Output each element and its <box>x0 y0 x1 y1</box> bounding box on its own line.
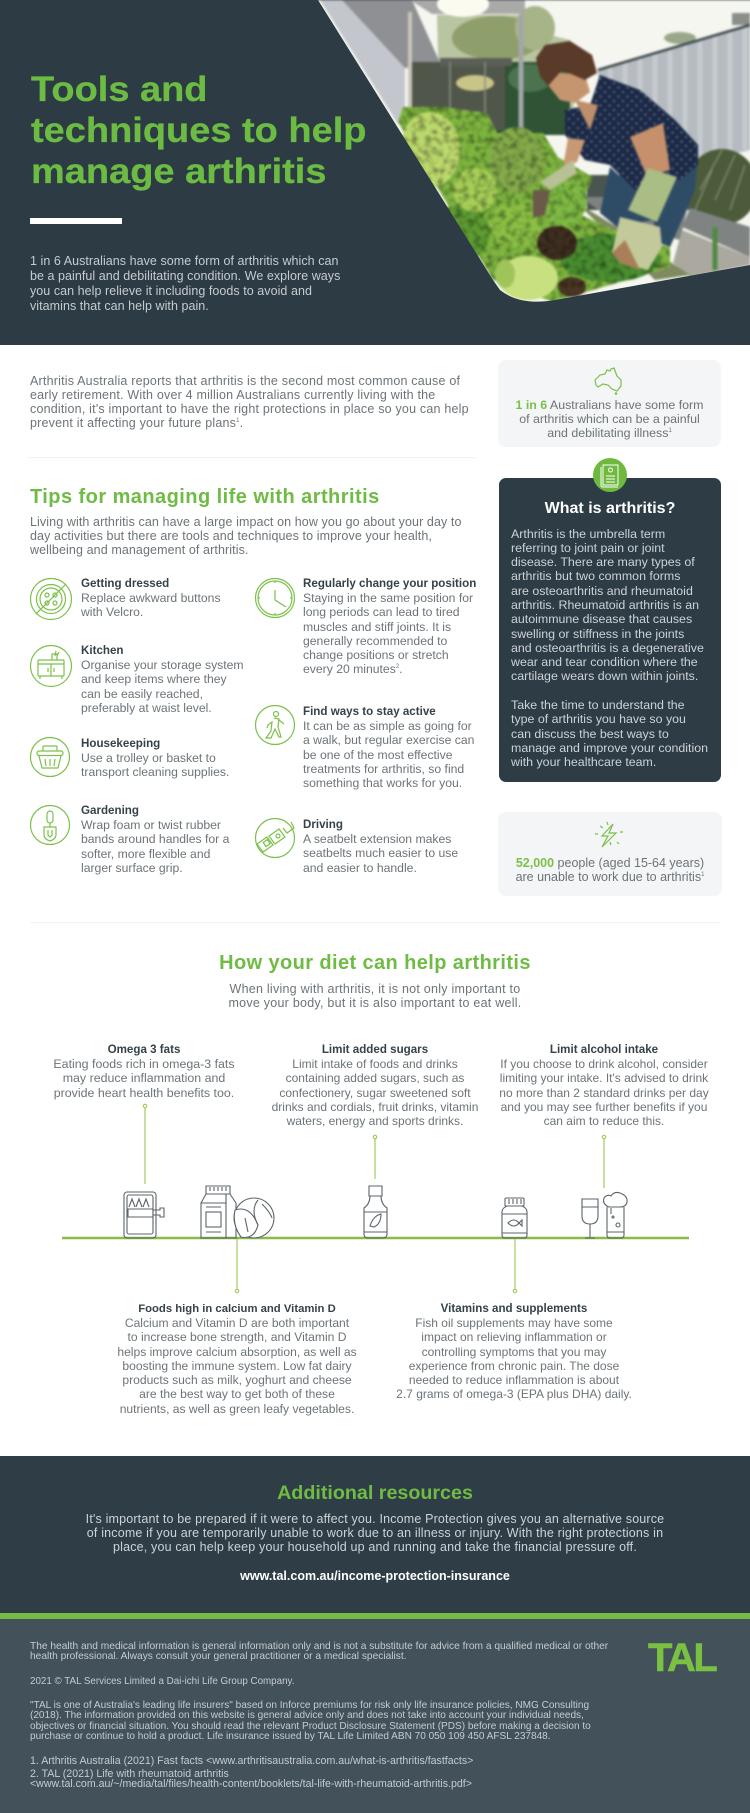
diet note: limit alcohol: If you choose to drink alcohol, consider <box>500 1057 708 1071</box>
tip: kitchen: Organise your storage system <box>81 658 244 672</box>
panel: additional resources <box>0 1456 750 1613</box>
diet note: omega 3 <box>53 1043 235 1100</box>
tip: regularly change your position <box>303 577 476 676</box>
icon: walking person <box>254 704 296 746</box>
diet note: calcium and vitamin D: to increase bone strength, and Vitamin D <box>128 1330 346 1344</box>
tip: regularly change your position: every 20 minutes2. <box>303 662 403 676</box>
tip: kitchen <box>81 644 244 715</box>
icon: sardine can <box>124 1192 164 1238</box>
resources text <box>86 1512 664 1554</box>
tip: housekeeping: transport cleaning supplies. <box>81 765 229 779</box>
intro paragraph: early retirement. With over 4 million Australians currently living with the <box>30 388 435 402</box>
diet note: vitamins and supplements: controlling symptoms that you may <box>422 1345 606 1359</box>
diet note: calcium and vitamin D: Calcium and Vitamin D are both important <box>125 1316 349 1330</box>
tip: regularly change your position: Regularly change your position <box>303 577 476 590</box>
diet note: limit added sugars: drinks and cordials, fruit drinks, vitamin <box>272 1100 478 1114</box>
icon: basket <box>30 736 70 778</box>
legal text: purchase or continue to hold a product. Life insurance issued by TAL Life Limited ABN 70 050 109 450 AFSL 237848. <box>30 1731 551 1742</box>
diet note: limit alcohol: Limit alcohol intake <box>550 1043 658 1056</box>
resources text: of income if you are temporarily unable to work due to an illness or injury. With the right protections in <box>87 1526 663 1540</box>
panel body text: referring to joint pain or joint <box>511 541 665 555</box>
icon: cabbage <box>234 1198 274 1238</box>
diet note: limit alcohol <box>499 1043 709 1128</box>
diet note: vitamins and supplements: needed to reduce inflammation is about <box>409 1373 619 1387</box>
panel body text: type of arthritis you have so you <box>511 712 686 726</box>
title rule <box>30 218 122 224</box>
icon: clock <box>254 578 296 618</box>
hero photo: woman gardening <box>318 0 750 302</box>
diet note: limit alcohol: no more than 2 standard drinks per day <box>499 1086 709 1100</box>
panel body text: are osteoarthritis and rheumatoid <box>511 584 693 598</box>
legal text: (2018). The information provided on this website is general advice only and does not take into account your individual needs, <box>30 1710 584 1721</box>
stat text <box>516 856 704 884</box>
references: <www.tal.com.au/~/media/tal/files/health-content/booklets/tal-life-with-rheumatoid-arthritis.pdf> <box>30 1778 472 1790</box>
tip: gardening: softer, more flexible and <box>81 847 210 861</box>
resources text: It's important to be prepared if it were to affect you. Income Protection gives you an alternative source <box>86 1512 664 1526</box>
panel heading: What is arthritis? <box>545 500 675 516</box>
tip: driving: seatbelts much easier to use <box>303 846 458 860</box>
intro summary <box>30 254 340 313</box>
diet note: vitamins and supplements <box>396 1302 632 1401</box>
icon: beer glass <box>604 1192 627 1238</box>
icon: button crossed out <box>30 578 72 620</box>
diet note: limit added sugars <box>272 1043 478 1128</box>
tip: driving: Driving <box>303 818 343 831</box>
tip: regularly change your position: change positions or stretch <box>303 648 449 662</box>
panel body text: autoimmune disease that causes <box>511 612 692 626</box>
diet note: omega 3: provide heart health benefits too. <box>54 1086 234 1100</box>
copyright: 2021 © TAL Services Limited a Dai-ichi Life Group Company. <box>30 1676 294 1686</box>
resources link: www.tal.com.au/income-protection-insurance <box>240 1568 510 1582</box>
legal text: "TAL is one of Australia's leading life insurers" based on Inforce premiums for risk only life insurance policies, NMG Consulting <box>30 1700 589 1710</box>
tip: find ways to stay active: It can be as simple as going for <box>303 719 472 733</box>
icon: garden trowel <box>30 804 70 846</box>
intro paragraph: condition, it's important to have the right protections in place so you can help <box>30 402 469 416</box>
panel body text: disease. There are many types of <box>511 555 695 569</box>
tip: gardening: Wrap foam or twist rubber <box>81 818 221 832</box>
stat card: 1 in 6 <box>498 360 721 447</box>
chart: food shelf timeline with icons <box>62 1104 689 1294</box>
disclaimer: The health and medical information is general information only and is not a substitute for advice from a qualified medical or other <box>30 1640 608 1652</box>
diet note: calcium and vitamin D: nutrients, as well as green leafy vegetables. <box>120 1402 354 1416</box>
tip: gardening: larger surface grip. <box>81 861 183 875</box>
tip: driving: and easier to handle. <box>303 861 417 875</box>
diet note: calcium and vitamin D <box>117 1303 357 1416</box>
tip: housekeeping: Housekeeping <box>81 737 160 750</box>
tip: housekeeping: Use a trolley or basket to <box>81 751 216 765</box>
icon: green book badge <box>593 458 627 492</box>
intro paragraph: Arthritis Australia reports that arthritis is the second most common cause of <box>30 374 460 388</box>
panel: tips <box>30 486 476 875</box>
resources text: place, you can help keep your household up and running and take the financial pressure off. <box>113 1540 637 1554</box>
diet note: limit added sugars: Limit added sugars <box>322 1043 428 1056</box>
TAL logo: TAL <box>648 1636 715 1680</box>
panel body text: Arthritis is the umbrella term <box>511 526 665 540</box>
stat card: 52,000 <box>498 812 722 896</box>
icon: lightning bolt <box>595 822 623 848</box>
foliage <box>398 107 670 302</box>
disclaimer <box>30 1640 608 1662</box>
title <box>31 70 366 191</box>
diet note: limit alcohol: limiting your intake. It's advised to drink <box>500 1071 708 1085</box>
tip: gardening: bands around handles for a <box>81 832 229 846</box>
panel body text: cartilage wears down within joints. <box>511 669 698 683</box>
tips intro text: Living with arthritis can have a large impact on how you go about your day to <box>30 514 462 528</box>
intro summary: be a painful and debilitating condition. We explore ways <box>30 269 340 283</box>
tip: getting dressed: Replace awkward buttons <box>81 591 221 605</box>
icon: Australia map <box>594 367 622 395</box>
diet note: calcium and vitamin D: helps improve calcium absorption, as well as <box>117 1345 357 1359</box>
intro summary: you can help relieve it including foods to avoid and <box>30 284 312 298</box>
diet intro text: move your body, but it is also important to eat well. <box>228 996 522 1010</box>
glass structure <box>412 62 505 130</box>
diet note: limit added sugars: containing added sugars, such as <box>286 1071 464 1085</box>
diet note: limit added sugars: confectionery, sugar sweetened soft <box>279 1086 471 1100</box>
title: Tools and <box>31 70 208 109</box>
tip: find ways to stay active: Find ways to stay active <box>303 705 436 718</box>
diet note: calcium and vitamin D: Foods high in calcium and Vitamin D <box>138 1303 336 1315</box>
icon: wine glass <box>582 1199 598 1238</box>
legal text: objectives or financial situation. You should read the relevant Product Disclosure Statement (PDS) before making a decision to <box>30 1720 591 1732</box>
panel body text: can discuss the best ways to <box>511 727 669 741</box>
tip: getting dressed: Getting dressed <box>81 577 169 590</box>
stat text <box>515 398 704 440</box>
tip: find ways to stay active <box>303 705 474 790</box>
tip: kitchen: Kitchen <box>81 644 124 657</box>
panel body text: arthritis. Rheumatoid arthritis is an <box>511 598 699 612</box>
diet intro text: When living with arthritis, it is not only important to <box>230 982 520 996</box>
wall and roof <box>320 0 405 124</box>
intro paragraph: prevent it affecting your future plans1. <box>30 416 243 430</box>
tip: kitchen: can be easily reached, <box>81 687 203 701</box>
stat text: are unable to work due to arthritis1 <box>516 870 704 884</box>
header panel <box>0 0 750 345</box>
stat text: 52,000 people (aged 15-64 years) <box>516 856 704 870</box>
diet heading: How your diet can help arthritis <box>219 952 531 974</box>
title: techniques to help <box>31 111 366 150</box>
disclaimer: health professional. Always consult your general practitioner or a medical specialist. <box>30 1651 407 1662</box>
stat text: and debilitating illness1 <box>547 426 672 440</box>
background trees <box>436 14 575 110</box>
panel body text: manage and improve your condition <box>511 741 708 755</box>
legal text <box>30 1700 591 1742</box>
tip: regularly change your position: muscles and stiff joints. It is <box>303 620 451 634</box>
panel body text: with your healthcare team. <box>511 755 656 769</box>
icon: bottle <box>364 1186 387 1238</box>
panel body text: arthritis but two common forms <box>511 569 680 583</box>
tip: driving <box>303 818 458 875</box>
diet note: calcium and vitamin D: products such as milk, yoghurt and cheese <box>122 1373 352 1387</box>
tip: find ways to stay active: a walk, but regular exercise can <box>303 733 474 747</box>
diet intro text <box>228 982 522 1010</box>
tip: find ways to stay active: treatments for arthritis, so find <box>303 762 464 776</box>
diet note: vitamins and supplements: Vitamins and supplements <box>441 1302 587 1315</box>
intro summary: vitamins that can help with pain. <box>30 299 209 313</box>
references: 1. Arthritis Australia (2021) Fast facts <www.arthritisaustralia.com.au/what-is-arthritis/fastfacts> 2. TAL (2021) Life with rheumatoid arthritis <box>30 1754 473 1780</box>
tip: gardening <box>81 804 230 875</box>
icon: milk carton <box>201 1186 236 1238</box>
diet note: limit added sugars: Limit intake of foods and drinks <box>292 1057 458 1071</box>
stat text: of arthritis which can be a painful <box>519 412 700 426</box>
tips intro text: wellbeing and management of arthritis. <box>30 543 249 557</box>
diet note: limit added sugars: waters, energy and sports drinks. <box>287 1114 463 1128</box>
tips intro text <box>30 514 462 557</box>
diet note: omega 3: Omega 3 fats <box>108 1043 180 1056</box>
intro summary: 1 in 6 Australians have some form of arthritis which can <box>30 254 338 268</box>
diet note: vitamins and supplements: impact on relieving inflammation or <box>421 1330 607 1344</box>
panel body text: and osteoarthritis is a degenerative <box>511 641 704 655</box>
diet note: calcium and vitamin D: are the best way to get both of these <box>139 1387 335 1401</box>
green divider bar <box>0 1613 750 1619</box>
icon: seatbelt <box>254 818 296 858</box>
diet note: limit alcohol: can aim to reduce this. <box>544 1114 664 1128</box>
panel: what is arthritis <box>499 478 721 782</box>
tip: regularly change your position: long periods can lead to tired <box>303 605 460 619</box>
tips heading: Tips for managing life with arthritis <box>30 486 380 508</box>
tip: kitchen: preferably at waist level. <box>81 701 212 715</box>
tip: getting dressed <box>81 577 221 619</box>
tip: regularly change your position: Staying in the same position for <box>303 591 473 605</box>
shelf line <box>62 1237 689 1239</box>
diet note: calcium and vitamin D: boosting the immune system. Low fat dairy <box>122 1359 352 1373</box>
raised bed and gravel <box>587 175 700 210</box>
panel body text: swelling or stiffness in the joints <box>511 627 684 641</box>
fence <box>664 32 696 44</box>
tips intro text: day activities but there are tools and techniques to improve your health, <box>30 529 432 543</box>
tip: getting dressed: with Velcro. <box>81 605 143 619</box>
tip: regularly change your position: generally recommended to <box>303 634 447 648</box>
icon: fish oil jar <box>502 1198 527 1238</box>
resources heading: Additional resources <box>277 1482 473 1504</box>
panel body text: wear and tear condition where the <box>511 655 698 669</box>
panel body text <box>511 526 708 769</box>
intro paragraph <box>30 374 469 430</box>
tip: find ways to stay active: something that works for you. <box>303 776 462 790</box>
title: manage arthritis <box>31 152 326 191</box>
tip: driving: A seatbelt extension makes <box>303 832 451 846</box>
icon: kitchen cabinet <box>30 644 72 688</box>
tip: kitchen: and keep items where they <box>81 672 227 686</box>
diet note: omega 3: Eating foods rich in omega-3 fats <box>53 1057 235 1071</box>
diet note: omega 3: may reduce inflammation and <box>63 1071 225 1085</box>
woman <box>598 166 698 248</box>
diet note: vitamins and supplements: 2.7 grams of omega-3 (EPA plus DHA) daily. <box>396 1387 632 1401</box>
panel body text: Take the time to understand the <box>511 698 685 712</box>
diet note: limit alcohol: and you may see further benefits if you <box>501 1100 707 1114</box>
diet note: vitamins and supplements: experience from chronic pain. The dose <box>409 1359 619 1373</box>
tip: find ways to stay active: be one of the most effective <box>303 748 453 762</box>
panel: footer <box>0 1619 750 1813</box>
tip: housekeeping <box>81 737 229 779</box>
diet note: vitamins and supplements: Fish oil supplements may have some <box>415 1316 613 1330</box>
stat text: 1 in 6 Australians have some form <box>515 398 704 412</box>
connectors <box>143 1104 606 1293</box>
tip: gardening: Gardening <box>81 804 139 817</box>
